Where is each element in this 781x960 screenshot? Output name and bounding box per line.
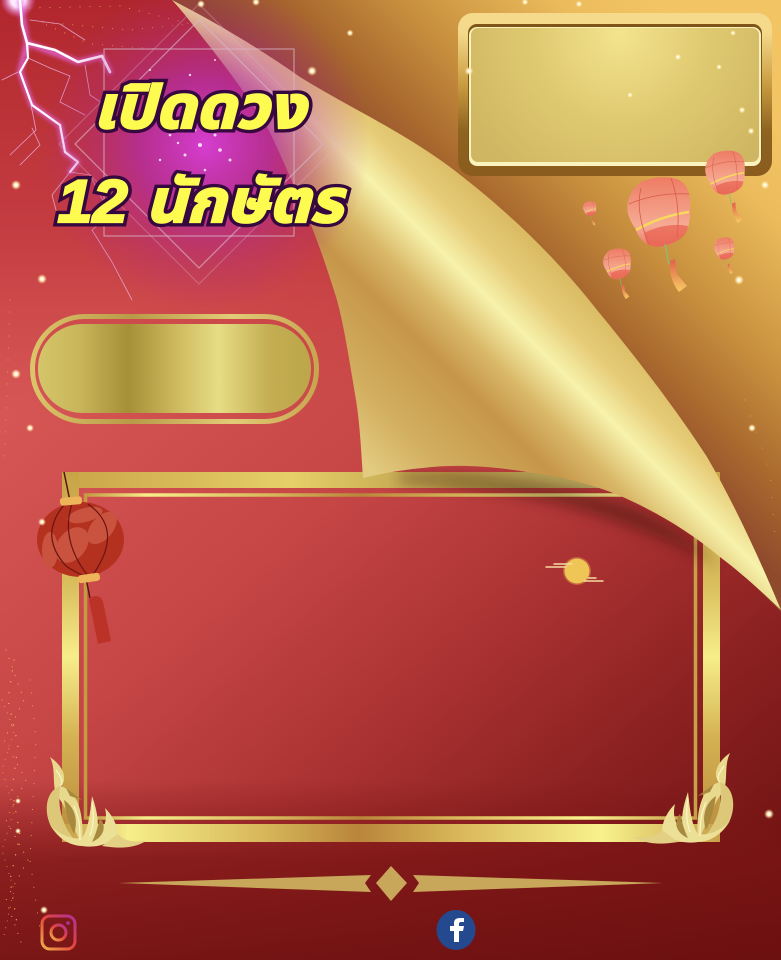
moon with clouds bbox=[546, 557, 603, 585]
icon: instagram bbox=[42, 916, 75, 949]
title: เปิดดวง bbox=[93, 74, 309, 141]
frame band: right bbox=[703, 472, 720, 842]
title: 12 นักษัตร bbox=[58, 168, 347, 235]
lantern lower left bbox=[603, 248, 631, 299]
frame inner thin line bbox=[86, 495, 696, 818]
lantern large bbox=[627, 177, 690, 292]
title: 12 นักษัตร bbox=[58, 168, 347, 235]
frame band: top bbox=[62, 472, 720, 488]
ornament: bottom left bbox=[47, 757, 146, 848]
red hanging lantern bbox=[37, 472, 124, 644]
pill plaque bbox=[32, 316, 316, 422]
title: เปิดดวง bbox=[93, 74, 309, 141]
frame band: left bbox=[62, 472, 79, 842]
title bbox=[58, 74, 347, 235]
lightning bolt bbox=[0, 0, 132, 300]
large gold frame bbox=[62, 472, 720, 842]
sky lanterns bbox=[583, 151, 745, 299]
lantern upper right bbox=[705, 151, 745, 223]
icon: facebook bbox=[436, 910, 476, 950]
page curl bbox=[172, 0, 781, 610]
frame band: bottom bbox=[62, 824, 720, 842]
gold title box bbox=[458, 13, 772, 176]
purple glow with geometric frame bbox=[40, 0, 370, 310]
gold revealed corner bbox=[172, 0, 781, 612]
lantern small left bbox=[583, 201, 596, 225]
ornament: bottom right bbox=[634, 753, 733, 844]
lantern lower right bbox=[714, 237, 734, 274]
diamond divider bbox=[119, 866, 663, 901]
peel shadow bbox=[400, 474, 720, 568]
